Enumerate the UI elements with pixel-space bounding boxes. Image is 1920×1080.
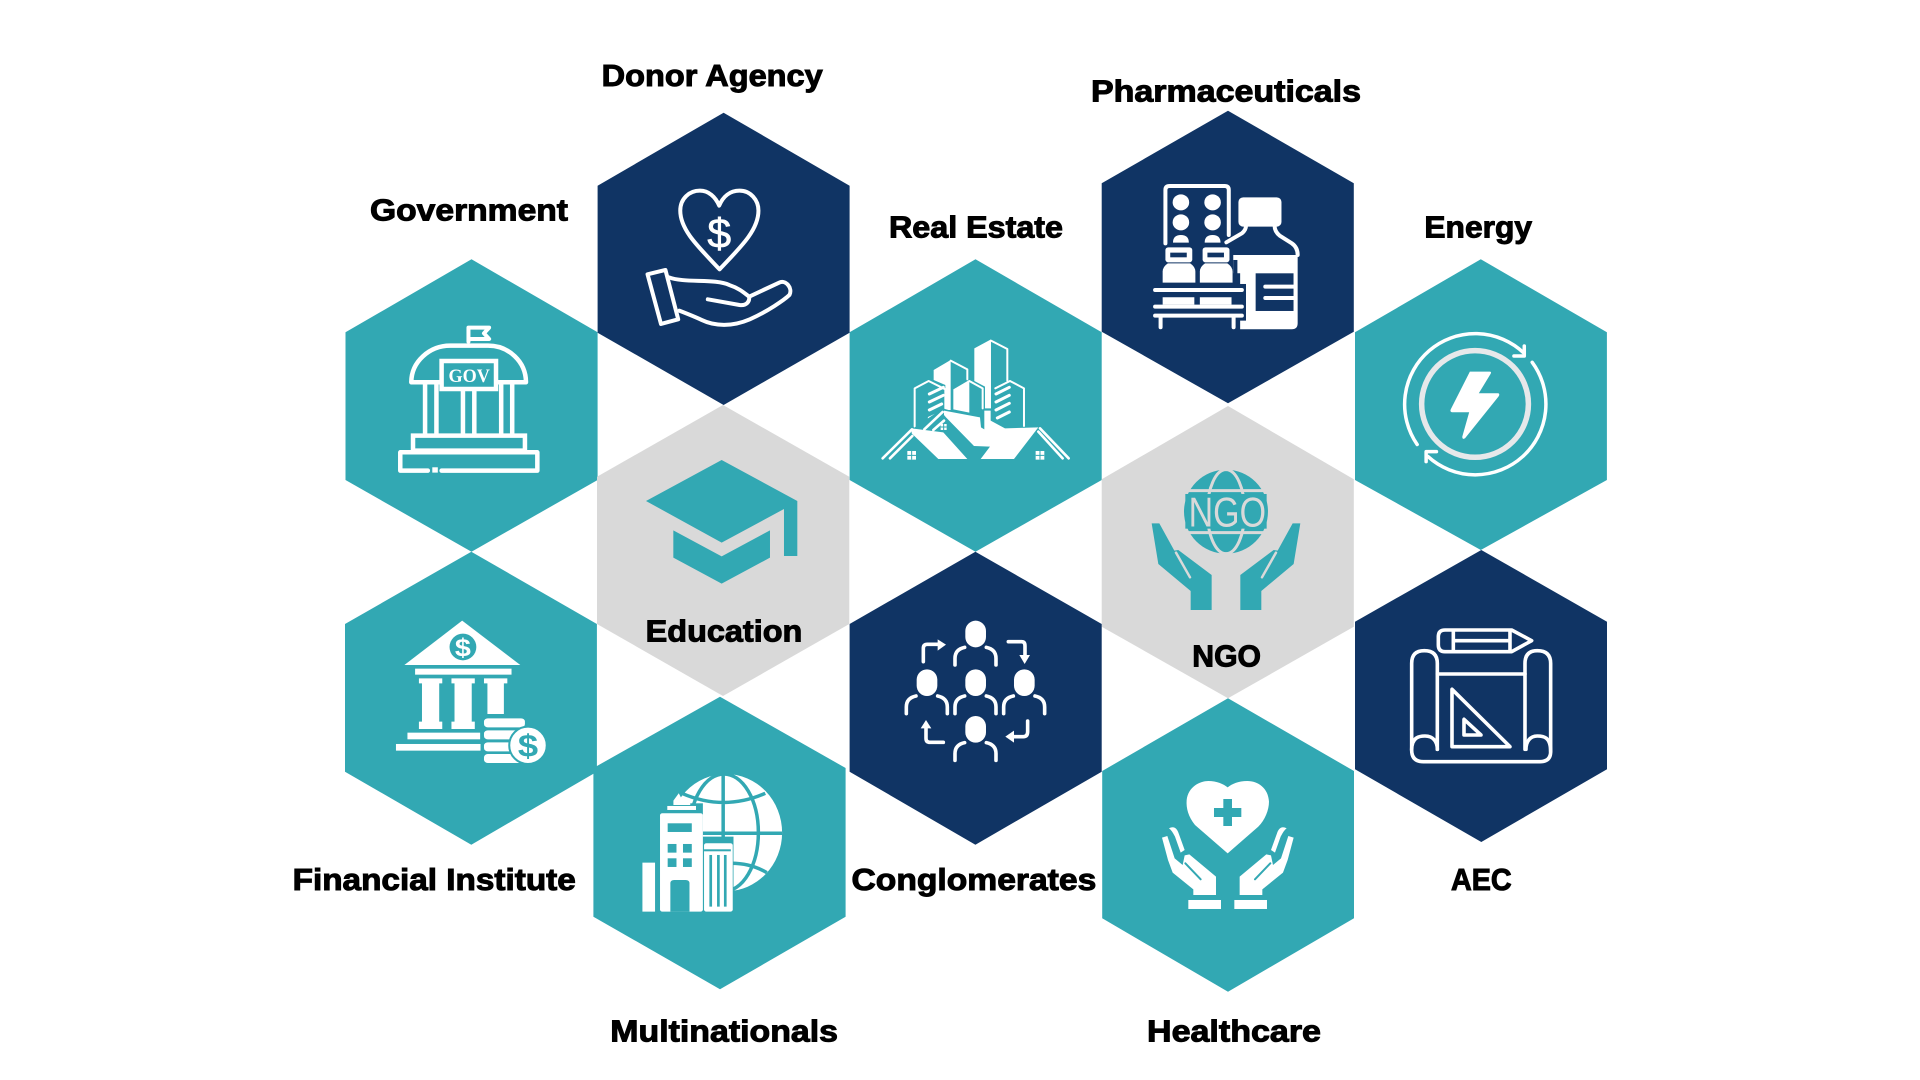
label: Education: Education	[646, 615, 802, 649]
panel: Education	[597, 405, 849, 696]
label: Conglomerates: Conglomerates	[852, 863, 1096, 897]
panel: Energy	[1355, 210, 1607, 550]
panel: Real Estate	[850, 210, 1102, 552]
panel: AEC	[1355, 550, 1607, 897]
label: Government: Government	[370, 194, 568, 228]
panel: NGO	[1102, 406, 1354, 698]
label: Pharmaceuticals: Pharmaceuticals	[1091, 75, 1361, 109]
icon: hand with heart and dollar	[648, 191, 790, 325]
icon: government building	[400, 328, 537, 473]
icon: pills and bottles	[1155, 186, 1298, 329]
label: NGO: NGO	[1192, 640, 1261, 674]
icon: hand with heart and dollar: $	[707, 210, 731, 256]
panel: Conglomerates	[850, 552, 1102, 897]
icon: graduation cap	[646, 460, 797, 584]
label: Financial Institute: Financial Institute	[293, 863, 576, 897]
icon: bank with coins: $	[518, 729, 538, 764]
panel: Healthcare	[1102, 698, 1354, 1049]
icon: people network with arrows	[906, 621, 1045, 760]
label: Real Estate: Real Estate	[889, 210, 1063, 244]
panel: Donor Agency	[598, 59, 850, 405]
icon: energy bolt in cycle	[1405, 334, 1546, 475]
panel: Government	[346, 194, 598, 552]
label: AEC: AEC	[1451, 863, 1512, 897]
panel: Financial Institute	[293, 552, 597, 897]
icon: government building: GOV	[448, 365, 490, 387]
panel: Multinationals	[593, 697, 846, 1049]
label: Healthcare: Healthcare	[1147, 1015, 1321, 1049]
icon: bank with coins	[396, 621, 547, 764]
label: Energy: Energy	[1424, 210, 1532, 244]
label: Donor Agency: Donor Agency	[602, 59, 823, 93]
icon: NGO globe in hands	[1152, 470, 1300, 610]
icon: globe and office buildings	[640, 774, 782, 915]
icon: blueprint with pencil	[1412, 630, 1551, 762]
panel: Pharmaceuticals	[1091, 75, 1361, 403]
icon: houses and towers	[883, 339, 1069, 460]
label: Multinationals: Multinationals	[610, 1015, 838, 1049]
icon: bank with coins: $	[455, 634, 471, 662]
icon: NGO globe in hands: NGO	[1189, 489, 1266, 536]
icon: hands holding heart	[1162, 781, 1294, 909]
